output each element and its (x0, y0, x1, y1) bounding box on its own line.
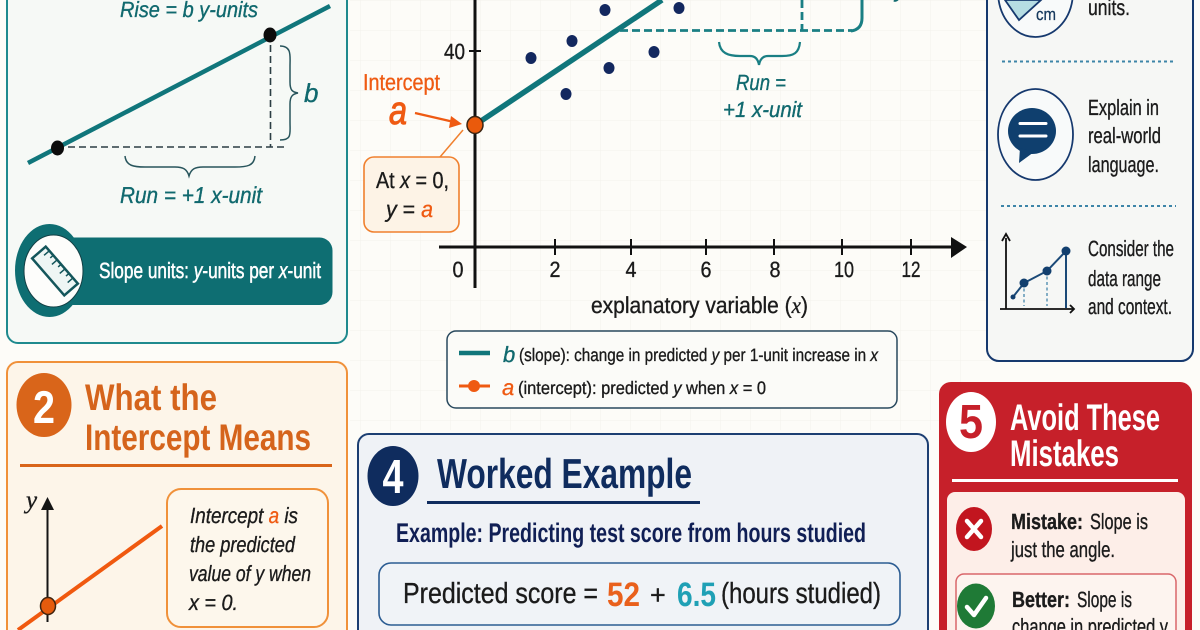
mistake text: Mistake: (1011, 509, 1083, 534)
icon: cross (956, 507, 992, 551)
callout: at x = 0: y = a (384, 196, 433, 222)
callout: intercept definition: x = 0. (188, 590, 238, 615)
tip text: data range: data range (1088, 266, 1161, 291)
axis labels: 6 (700, 257, 712, 282)
label: run (723, 70, 803, 122)
icon: speech bubble (998, 89, 1073, 180)
regression line (475, 0, 662, 125)
mistake text: Slope is (1090, 509, 1148, 534)
rise brace (280, 46, 298, 140)
number badge: 5 (959, 396, 983, 449)
better box (956, 574, 1176, 630)
heading: Intercept Means (85, 417, 311, 458)
axis labels: 2 (550, 257, 560, 282)
equation box: (hours studied) (721, 578, 881, 610)
legend: b (503, 342, 515, 367)
panel 3: main chart (363, 0, 967, 408)
callout: intercept definition (167, 489, 328, 627)
number badge: 4 (382, 451, 404, 504)
tip text: real-world language: real-world (1088, 123, 1161, 148)
icon: data range chart (1000, 234, 1074, 313)
icon: check (957, 584, 995, 628)
run and rise dashes (620, 0, 852, 30)
better text: Better: (1012, 587, 1070, 612)
equation box: 52 (607, 576, 640, 614)
axis labels: 8 (770, 257, 780, 282)
heading (85, 377, 311, 458)
axis labels: 4 (626, 257, 636, 282)
tip text: real-world language: Explain in (1088, 95, 1159, 120)
label: intercept: a (389, 89, 407, 133)
panel 2: intercept (7, 362, 347, 630)
rise and run dashes (57, 45, 284, 147)
run brace (719, 42, 800, 65)
tip text: data range (1088, 236, 1174, 319)
callout: intercept definition: the predicted (190, 532, 296, 557)
icon: ruler with cm: cm (1036, 5, 1056, 24)
intercept point (467, 116, 483, 134)
callout: intercept definition: Intercept a is (190, 503, 298, 528)
equation box (379, 563, 900, 625)
number badge (946, 392, 996, 452)
pill text: Slope units: y-units per x-unit (99, 258, 321, 283)
mistake text: just the angle. (1010, 537, 1115, 562)
legend: a (502, 375, 514, 400)
callout: at x = 0: At x = 0, (376, 167, 449, 193)
rise brace (851, 0, 862, 31)
label: run: Run = +1 x-unit (120, 182, 263, 208)
arrow to intercept (415, 113, 462, 128)
axis labels: 40 (444, 39, 465, 64)
heading: What the (85, 377, 217, 418)
slope units pill (15, 224, 332, 317)
panel: interpretation tips (987, 0, 1193, 361)
legend: (intercept): predicted y when x = 0 (518, 378, 766, 398)
icon: ruler with cm (999, 0, 1072, 37)
label: intercept: Intercept (363, 69, 441, 95)
heading: Mistakes (1010, 433, 1119, 474)
callout: intercept definition: value of y when (189, 561, 311, 586)
chart axes (439, 0, 967, 288)
data points (526, 2, 684, 100)
axis labels: 12 (902, 257, 920, 282)
example subtitle: Example: Predicting test score from hours studied (396, 518, 866, 548)
mistake text (1010, 509, 1148, 562)
number badge (368, 446, 418, 506)
run brace (125, 156, 255, 176)
panel 1: slope (7, 0, 347, 343)
equation box: + (650, 580, 666, 610)
label: b: b (304, 78, 318, 108)
equation box: Predicted score = (403, 578, 598, 610)
icon: ruler (32, 247, 78, 295)
better text (1012, 587, 1168, 630)
equation box: 6.5 (677, 576, 716, 614)
intercept mini chart (18, 487, 162, 630)
legend: (slope): change in predicted y per 1-unit increase in x (519, 345, 879, 365)
heading (1010, 397, 1160, 474)
label: intercept (363, 69, 441, 133)
legend (447, 331, 897, 408)
better text: Slope is (1077, 587, 1132, 612)
number badge (16, 373, 72, 437)
tip text: real-world language (1088, 95, 1161, 177)
panel 4: worked example (358, 434, 928, 630)
mistake list (947, 492, 1185, 630)
heading: Worked Example (437, 450, 692, 497)
slope line (28, 6, 330, 163)
intercept mini chart: y (23, 487, 38, 514)
label: run: Run = (736, 70, 786, 95)
axis labels: 0 (452, 257, 464, 282)
panel 5: mistakes (939, 382, 1192, 630)
number badge: 2 (33, 381, 55, 433)
callout: at x = 0 (364, 130, 463, 232)
line points (51, 28, 276, 156)
x-axis title: explanatory variable (x) (591, 292, 808, 318)
label: run: +1 x-unit (723, 97, 803, 122)
axis labels: 10 (834, 257, 854, 282)
tip text: real-world language: language. (1088, 152, 1159, 177)
axis labels (444, 39, 920, 282)
